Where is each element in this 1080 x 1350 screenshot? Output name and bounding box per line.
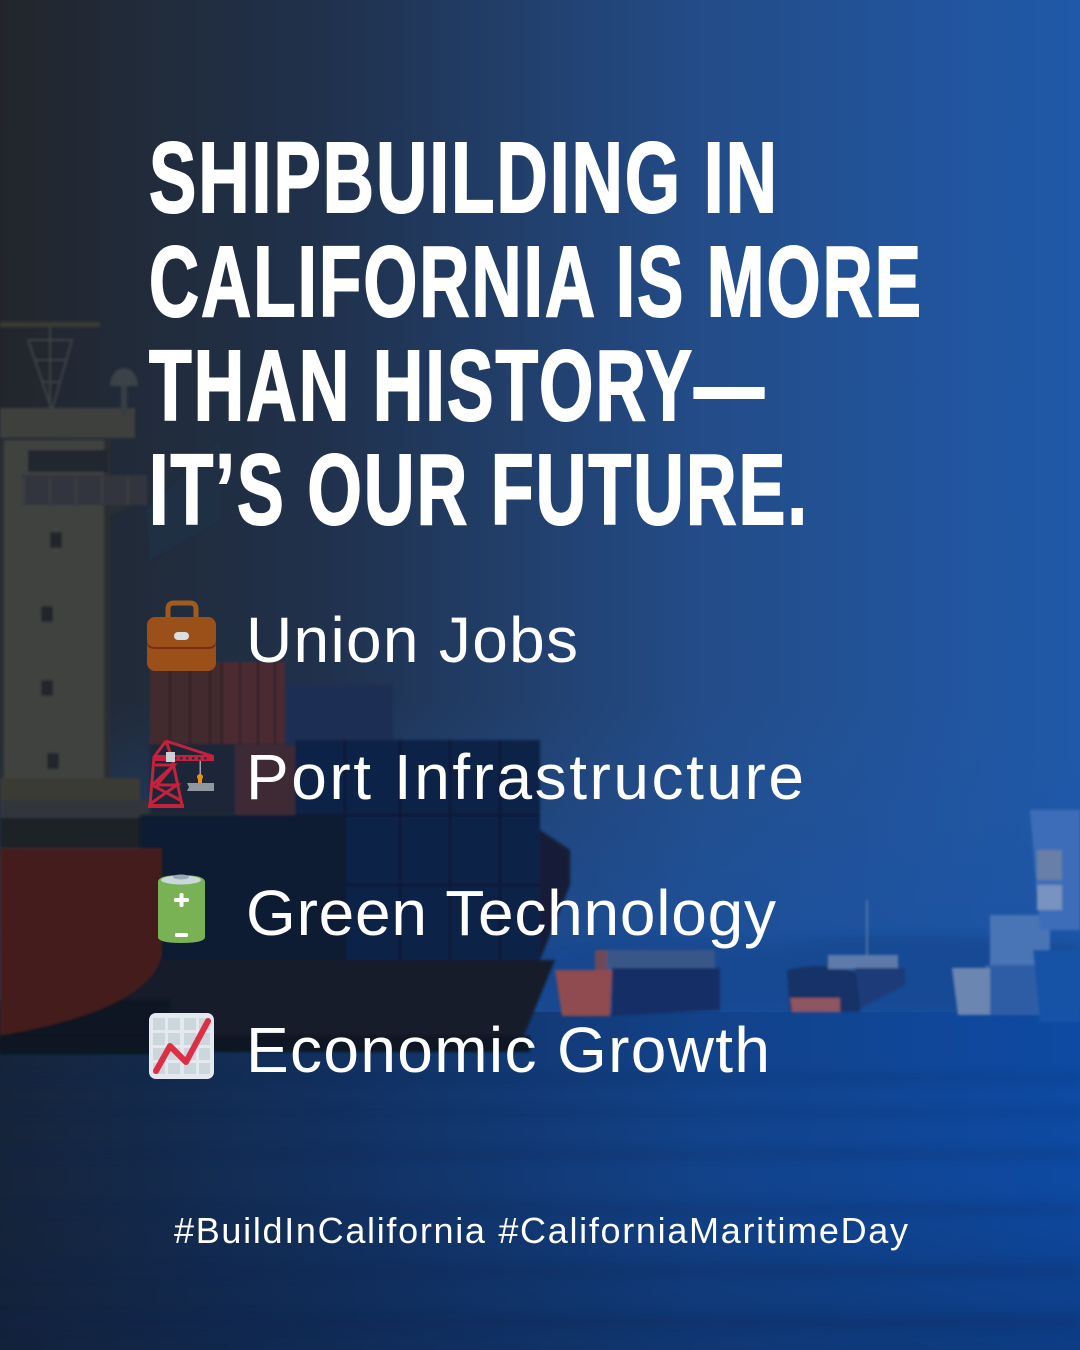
blue hull right xyxy=(1033,950,1080,1022)
water xyxy=(0,1012,1080,1350)
icon: briefcase xyxy=(147,603,216,671)
list item: economic growth: Economic Growth xyxy=(246,1014,770,1086)
title: SHIPBUILDING IN xyxy=(149,122,779,234)
containers xyxy=(100,662,570,1045)
left ship superstructure xyxy=(0,322,225,848)
list item: port infrastructure: Port Infrastructure xyxy=(246,741,804,813)
container ship hull xyxy=(100,960,555,1045)
title: THAN HISTORY— xyxy=(149,330,766,442)
center ship xyxy=(787,966,860,1012)
list item: green technology: Green Technology xyxy=(246,877,776,949)
icon: battery xyxy=(158,874,205,943)
hashtags: #BuildInCalifornia #CaliforniaMaritimeDay xyxy=(174,1210,908,1251)
list item: union jobs: Union Jobs xyxy=(246,604,578,676)
red ship xyxy=(600,950,715,972)
distant tree line xyxy=(540,935,1080,1012)
title: IT’S OUR FUTURE. xyxy=(149,434,809,546)
red hull xyxy=(0,1000,170,1054)
icon: crane xyxy=(148,741,214,808)
title xyxy=(149,122,923,546)
white ship xyxy=(985,965,1040,1015)
icon: rising chart xyxy=(149,1013,214,1079)
distant ships xyxy=(555,810,1080,1022)
water ripples xyxy=(0,1075,1080,1329)
